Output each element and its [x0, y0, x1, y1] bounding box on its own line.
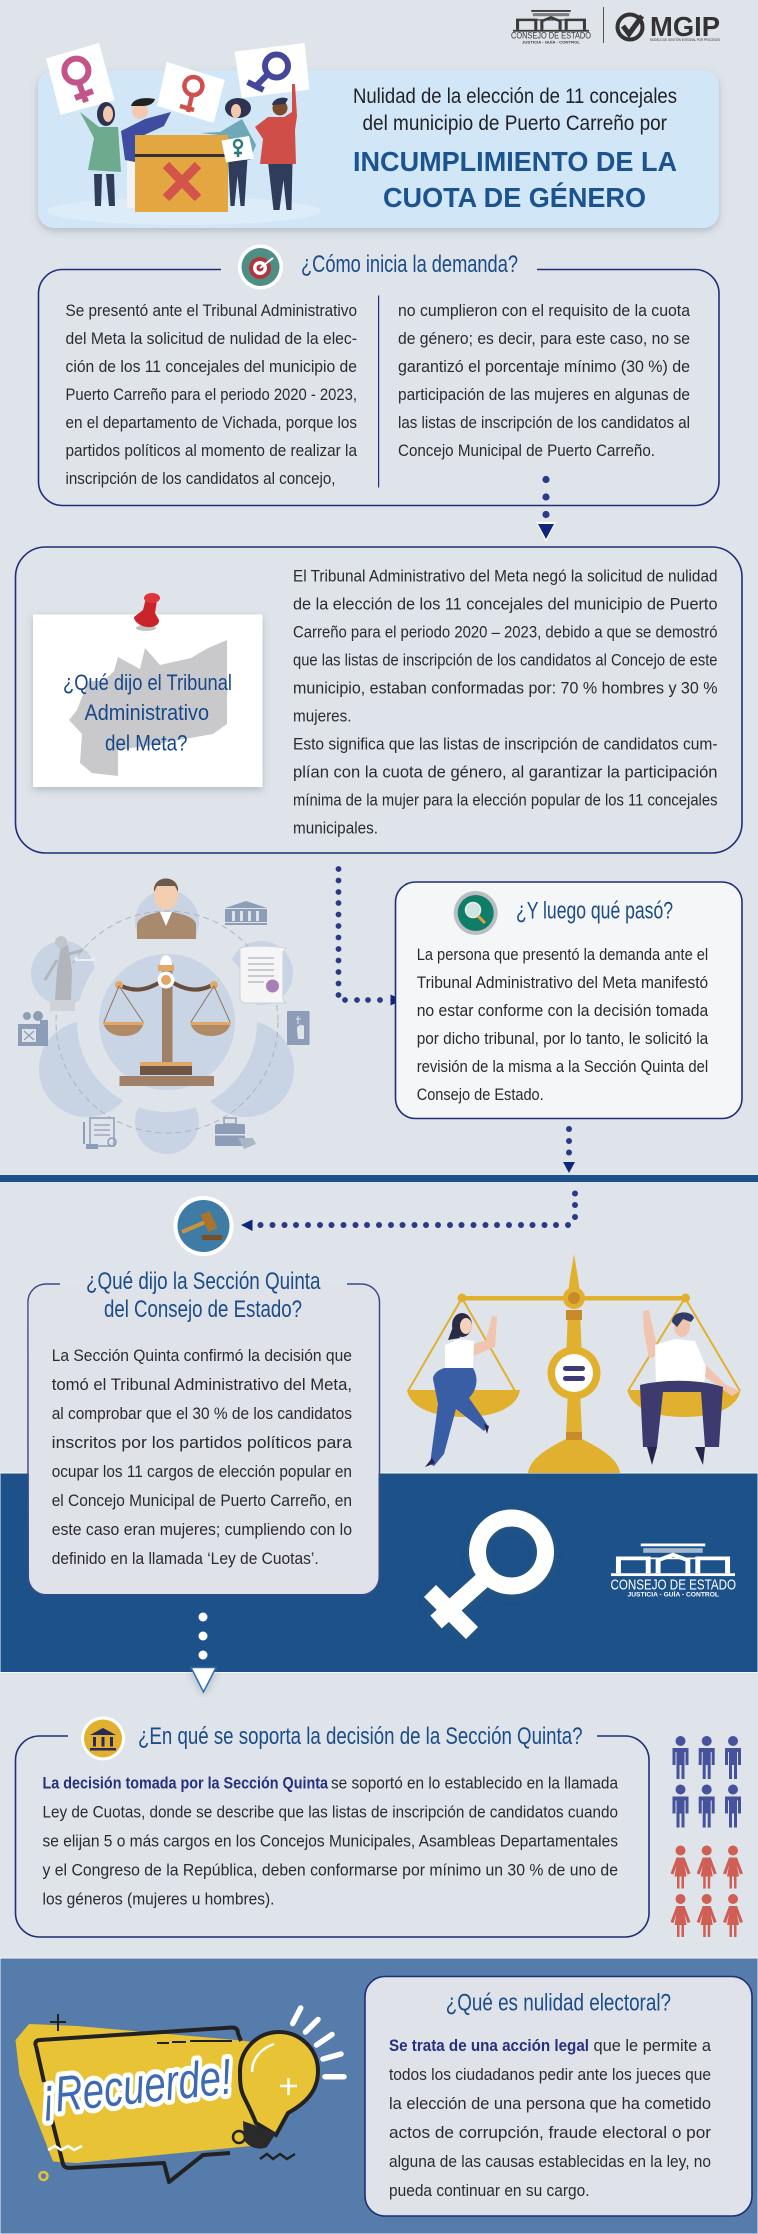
panel: que dijo el tribunal — [16, 547, 742, 853]
body text: La Sección Quinta confirmó la decisión que — [52, 1346, 352, 1365]
arrow: white dotted down — [191, 1612, 216, 1692]
blue band — [0, 1473, 758, 1672]
header subtitle — [353, 85, 677, 135]
logo: Consejo de Estado white: JUSTICIA - GUÍA - CONTROL — [628, 1590, 719, 1598]
body text: al comprobar que el 30 % de los candidatos — [52, 1404, 352, 1423]
body text: Tribunal Administrativo del Meta manifestó — [417, 973, 708, 992]
icon: gavel — [174, 1196, 234, 1256]
icon: scroll with seal — [240, 946, 286, 1003]
header subtitle: Nulidad de la elección de 11 concejales — [353, 85, 677, 108]
logos: Consejo de Estado and MGIP — [511, 7, 720, 44]
icon: document and stamp — [84, 1118, 116, 1149]
man — [640, 1310, 740, 1465]
card title: Administrativo — [84, 700, 209, 725]
panel: header banner — [38, 43, 719, 228]
icon: hand on book — [287, 1011, 310, 1045]
panel: en que se soporta la decision — [16, 1716, 649, 1937]
heading: ¿Y luego qué pasó? — [516, 898, 673, 924]
illustration: gold balance with woman and man — [407, 1254, 740, 1473]
arrow: dotted to gavel icon — [241, 1190, 578, 1231]
body text: pueda continuar en su cargo. — [389, 2181, 590, 2200]
card title — [63, 670, 232, 756]
body text: y el Congreso de la República, deben conformarse por mínimo un 30 % de uno de — [42, 1860, 618, 1880]
heading: del Consejo de Estado? — [104, 1296, 302, 1323]
logos: Consejo de Estado and MGIP: CONSEJO DE ESTADO — [511, 30, 591, 40]
illustration: justice scales and legal icons — [18, 878, 310, 1154]
panel: como inicia la demanda — [38, 244, 719, 506]
icons: six men pictogram — [672, 1736, 741, 1828]
logos: Consejo de Estado and MGIP: MGIP — [650, 11, 720, 42]
text: decision del tribunal: municipio, estaban conformadas por: 70 % hombres y 30 % — [293, 678, 718, 698]
scales of justice — [103, 955, 231, 1086]
body text: Ley de Cuotas, donde se describe que las listas de inscripción de candidatos cuando — [42, 1802, 618, 1822]
text column left: del Meta la solicitud de nulidad de la elec- — [66, 329, 357, 348]
body text: los géneros (mujeres u hombres). — [42, 1890, 274, 1908]
header title — [353, 146, 677, 213]
body text: no estar conforme con la decisión tomada — [417, 1001, 709, 1020]
body text: se elijan 5 o más cargos en los Concejos Municipales, Asambleas Departamentales — [42, 1832, 618, 1850]
text column right: no cumplieron con el requisito de la cuota — [398, 301, 691, 320]
logo: Consejo de Estado white — [610, 1544, 736, 1598]
text column right: las listas de inscripción de los candidatos al — [398, 413, 690, 432]
body text: ocupar los 11 cargos de elección popular en — [52, 1462, 352, 1481]
illustration: people with ballot box and signs — [46, 43, 321, 225]
panel: que dijo la seccion quinta — [28, 1268, 380, 1595]
icon: magnifier — [454, 891, 498, 935]
text column left: Se presentó ante el Tribunal Administrativo — [66, 301, 357, 320]
note card with map — [33, 593, 262, 787]
body text: La decisión tomada por la Sección Quinta — [42, 1774, 328, 1792]
icon: briefcase — [215, 1118, 256, 1149]
divider band — [0, 1175, 758, 1182]
body text: Se trata de una acción legal — [389, 2036, 589, 2055]
heading: ¿Qué es nulidad electoral? — [446, 1990, 671, 2016]
text: decision del tribunal: mujeres. — [293, 706, 352, 726]
text: decision del tribunal: Esto significa que las listas de inscripción de candidatos cum- — [293, 734, 718, 754]
body text — [52, 1346, 353, 1568]
text column left: Puerto Carreño para el periodo 2020 - 2023, — [66, 385, 357, 404]
body text: la elección de una persona que ha cometido — [389, 2094, 711, 2113]
heading: ¿Cómo inicia la demanda? — [301, 251, 518, 278]
arrow: dotted elbow to panel y luego que paso — [336, 866, 402, 1006]
body text: se soportó en lo establecido en la llamada — [331, 1774, 618, 1792]
text: decision del tribunal: de la elección de los 11 concejales del municipio de Puerto — [293, 594, 718, 614]
text: decision del tribunal: plían con la cuota de género, al garantizar la participación — [293, 762, 718, 782]
heading — [86, 1268, 321, 1323]
arrow: dotted down to section band — [563, 1126, 575, 1173]
text column right: Concejo Municipal de Puerto Carreño. — [398, 441, 655, 460]
heading: ¿Qué dijo la Sección Quinta — [86, 1268, 321, 1295]
body text: alguna de las causas establecidas en la ley, no — [389, 2152, 711, 2171]
text column left: en el departamento de Vichada, porque los — [66, 413, 357, 432]
text: decision del tribunal: El Tribunal Administrativo del Meta negó la solicitud de nulidad — [293, 566, 718, 586]
body text: el Concejo Municipal de Puerto Carreño, en — [52, 1491, 352, 1510]
woman — [425, 1313, 497, 1467]
body text — [42, 1774, 618, 1908]
body text: por dicho tribunal, por lo tanto, le solicitó la — [417, 1029, 709, 1048]
body text: La persona que presentó la demanda ante el — [417, 945, 708, 964]
body text: definido en la llamada ‘Ley de Cuotas’. — [52, 1549, 319, 1568]
body text: inscritos por los partidos políticos para — [52, 1433, 353, 1452]
icon: courthouse — [225, 901, 267, 925]
text column right: de género; es decir, para este caso, no se — [398, 329, 690, 348]
logos: Consejo de Estado and MGIP: JUSTICIA - GUÍA - CONTROL — [522, 40, 581, 44]
text column right: participación de las mujeres en algunas de — [398, 385, 690, 404]
heading: ¿En qué se soporta la decisión de la Sección Quinta? — [138, 1723, 582, 1750]
text column left: ción de los 11 concejales del municipio de — [66, 357, 357, 376]
icon: statue of justice — [45, 936, 94, 1011]
icon: ballot box — [18, 1011, 48, 1046]
icons: six women pictogram — [670, 1846, 743, 1937]
header title: CUOTA DE GÉNERO — [383, 182, 646, 213]
icon: bank — [81, 1716, 125, 1760]
text column left: partidos políticos al momento de realizar la — [66, 441, 357, 460]
arrow: dotted down to second panel — [536, 476, 556, 542]
card title: del Meta? — [105, 730, 188, 756]
recuerde lettering: ¡Recuerde! — [39, 2048, 234, 2124]
body text — [389, 2036, 712, 2200]
icon: target — [238, 244, 283, 290]
text column left: inscripción de los candidatos al concejo, — [66, 469, 336, 488]
body text — [417, 945, 709, 1104]
icon: white female symbol — [430, 1518, 546, 1633]
text: decision del tribunal: municipales. — [293, 818, 378, 838]
body text: Consejo de Estado. — [417, 1085, 544, 1104]
text column right — [398, 301, 691, 460]
body text: revisión de la misma a la Sección Quinta del — [417, 1057, 708, 1076]
person icon — [137, 878, 196, 939]
text column right: garantizó el porcentaje mínimo (30 %) de — [398, 357, 690, 376]
bottom blue section — [0, 1958, 758, 2234]
header title: INCUMPLIMIENTO DE LA — [353, 146, 677, 177]
text: decision del tribunal — [293, 566, 718, 838]
body text: tomó el Tribunal Administrativo del Meta, — [52, 1375, 352, 1394]
body text: este caso eran mujeres; cumpliendo con lo — [52, 1520, 352, 1539]
icon: red push pin — [134, 593, 160, 631]
panel: que es nulidad electoral — [365, 1976, 752, 2216]
illustration: recuerde speech bubble and light bulb — [16, 2008, 344, 2182]
body text: actos de corrupción, fraude electoral o por — [389, 2123, 711, 2142]
logos: Consejo de Estado and MGIP: MODELO DE GESTIÓN INTEGRAL POR PROCESOS — [650, 37, 720, 42]
body text: que le permite a — [594, 2036, 712, 2055]
body text: todos los ciudadanos pedir ante los jueces que — [389, 2065, 711, 2084]
text column left — [66, 301, 357, 488]
panel: y luego que paso — [396, 882, 742, 1118]
light bulb — [240, 2032, 318, 2149]
card title: ¿Qué dijo el Tribunal — [63, 670, 232, 695]
header subtitle: del municipio de Puerto Carreño por — [362, 112, 667, 135]
